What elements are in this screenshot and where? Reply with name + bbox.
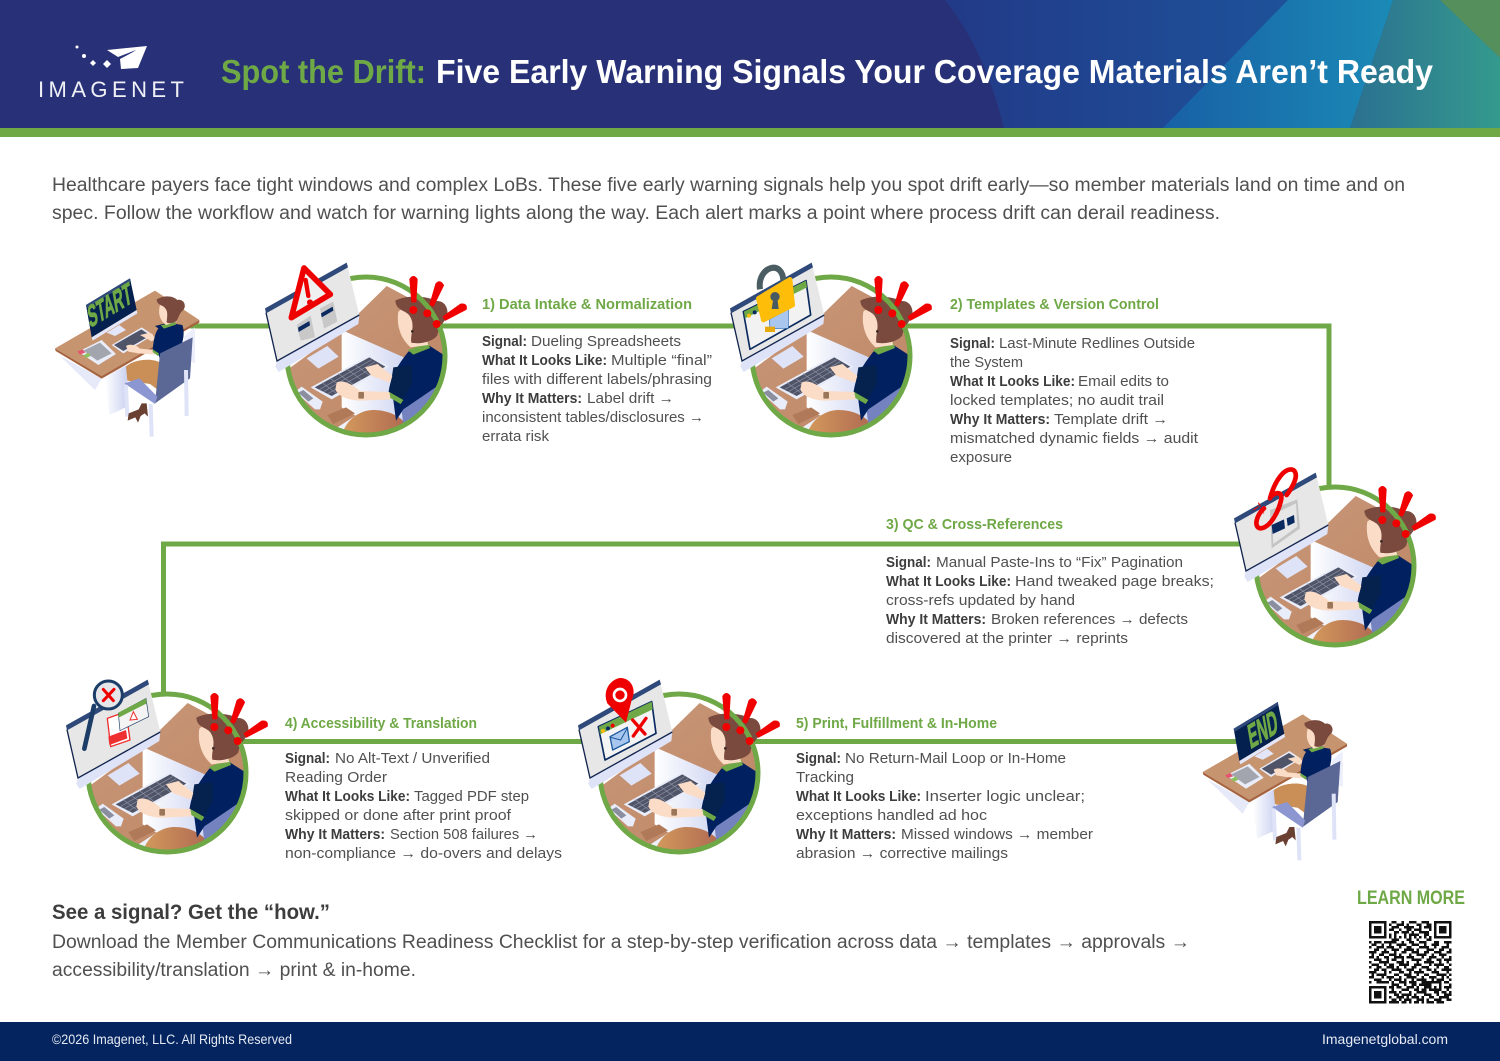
step 5 text: exceptions handled ad hoc (796, 807, 988, 824)
step 5 text: What It Looks Like: (796, 788, 921, 805)
icon: warning triangle (291, 268, 337, 341)
call to action: accessibility/translation → print & in-home. (52, 960, 416, 981)
call to action heading: See a signal? Get the “how.” (52, 900, 330, 924)
step 2 text: mismatched dynamic fields → audit (950, 430, 1199, 447)
icon: mail window and location pin (598, 678, 656, 760)
step 2 text: What It Looks Like: (950, 373, 1075, 390)
step 1 text: files with different labels/phrasing (482, 371, 712, 388)
step 4 text: Why It Matters: (285, 826, 385, 843)
step 4 text: What It Looks Like: (285, 788, 410, 805)
call to action: Download the Member Communications Readiness Checklist for a step-by-step verification across data → templates → approvals → (52, 932, 1190, 953)
icon: padlock and email (743, 268, 811, 349)
intro text: spec. Follow the workflow and watch for warning lights along the way. Each alert marks a point where process drift can derail readiness. (52, 203, 1220, 224)
logo: Imagenet (38, 46, 184, 102)
step 5 text: Tracking (796, 769, 854, 786)
call to action (52, 900, 1190, 981)
icon: broken chain link (1253, 469, 1300, 548)
step 4 text: Tagged PDF step (414, 788, 529, 805)
header blue gradient shape (945, 0, 1500, 128)
step 2 text: the System (950, 354, 1023, 371)
step 1 text: errata risk (482, 428, 549, 445)
step 5 text: Inserter logic unclear; (925, 788, 1085, 805)
step 1 text: Why It Matters: (482, 390, 582, 407)
step 3 text: discovered at the printer → reprints (886, 630, 1128, 647)
step 4 text: non-compliance → do-overs and delays (285, 845, 562, 862)
step 2 text: Signal: (950, 335, 995, 352)
step 3 text: Manual Paste-Ins to “Fix” Pagination (936, 554, 1183, 571)
illustration: start desk (55, 276, 199, 437)
step 2 text: Last-Minute Redlines Outside (999, 335, 1195, 352)
monitor text END: END (1245, 703, 1280, 757)
step 1 text: What It Looks Like: (482, 352, 607, 369)
step 5 text (796, 715, 1093, 862)
step 2 text: exposure (950, 449, 1012, 466)
learn more label: LEARN MORE (1357, 888, 1465, 909)
illustration: broken chain workstation (1234, 469, 1435, 653)
step 4 text: No Alt-Text / Unverified (335, 750, 490, 767)
step 3 text: Why It Matters: (886, 611, 986, 628)
illustration: magnifier PDF workstation (66, 680, 267, 860)
step 2 text (950, 296, 1199, 466)
step 1 text: Label drift → (587, 390, 674, 407)
step 5 text: No Return-Mail Loop or In-Home (845, 750, 1066, 767)
step 4 text: skipped or done after print proof (285, 807, 512, 824)
step 3 text (886, 516, 1214, 647)
copyright: ©2026 Imagenet, LLC. All Rights Reserved (52, 1032, 292, 1047)
step 2 text: Template drift → (1054, 411, 1168, 428)
heading step 3: 3) QC & Cross-References (886, 516, 1063, 533)
step 3 text: Broken references → defects (991, 611, 1188, 628)
step 2 text: Why It Matters: (950, 411, 1050, 428)
step 5 text: Why It Matters: (796, 826, 896, 843)
heading step 4: 4) Accessibility & Translation (285, 715, 477, 732)
step 4 text: Signal: (285, 750, 330, 767)
illustration: padlock workstation (730, 263, 931, 443)
icon: magnifier and PDF (84, 681, 149, 749)
QR code (1369, 921, 1452, 1004)
step 1 text: Dueling Spreadsheets (531, 333, 681, 350)
heading step 2: 2) Templates & Version Control (950, 296, 1159, 313)
header cyan facet (1163, 0, 1393, 128)
illustration: warning triangle workstation (265, 263, 466, 443)
step 3 text: What It Looks Like: (886, 573, 1011, 590)
illustration: location pin workstation (578, 678, 779, 860)
step 5 text: Signal: (796, 750, 841, 767)
step 1 text: inconsistent tables/disclosures → (482, 409, 704, 426)
illustration: end desk (1203, 702, 1347, 860)
step 5 text: Missed windows → member (901, 826, 1093, 843)
monitor text START: START (86, 276, 134, 335)
step 2 text: Email edits to (1078, 373, 1169, 390)
header green stripe (0, 128, 1500, 137)
logo: Imagenet: IMAGENET (38, 77, 184, 102)
step 2 text: locked templates; no audit trail (950, 392, 1164, 409)
heading step 5: 5) Print, Fulfillment & In-Home (796, 715, 997, 732)
step 3 text: Hand tweaked page breaks; (1015, 573, 1214, 590)
heading step 1: 1) Data Intake & Normalization (482, 296, 692, 313)
header green corner (1440, 0, 1500, 58)
workflow connector line (164, 326, 1329, 742)
header banner (0, 0, 1500, 137)
step 4 text: Section 508 failures → (390, 826, 538, 843)
step 1 text: Signal: (482, 333, 527, 350)
step 3 text: cross-refs updated by hand (886, 592, 1075, 609)
step 4 text: Reading Order (285, 769, 387, 786)
title: Spot the Drift: (221, 53, 426, 90)
step 4 text (285, 715, 562, 862)
website: Imagenetglobal.com (1322, 1032, 1448, 1047)
header teal facet (1350, 0, 1500, 128)
step 1 text (482, 296, 712, 445)
intro text: Healthcare payers face tight windows and complex LoBs. These five early warning signals help you spot drift early—so member materials land on time and on (52, 175, 1405, 196)
title: Five Early Warning Signals Your Coverage Materials Aren’t Ready (436, 53, 1434, 90)
step 5 text: abrasion → corrective mailings (796, 845, 1008, 862)
footer bar (0, 1022, 1500, 1061)
step 1 text: Multiple “final” (611, 352, 712, 369)
step 3 text: Signal: (886, 554, 931, 571)
intro text (52, 175, 1405, 224)
